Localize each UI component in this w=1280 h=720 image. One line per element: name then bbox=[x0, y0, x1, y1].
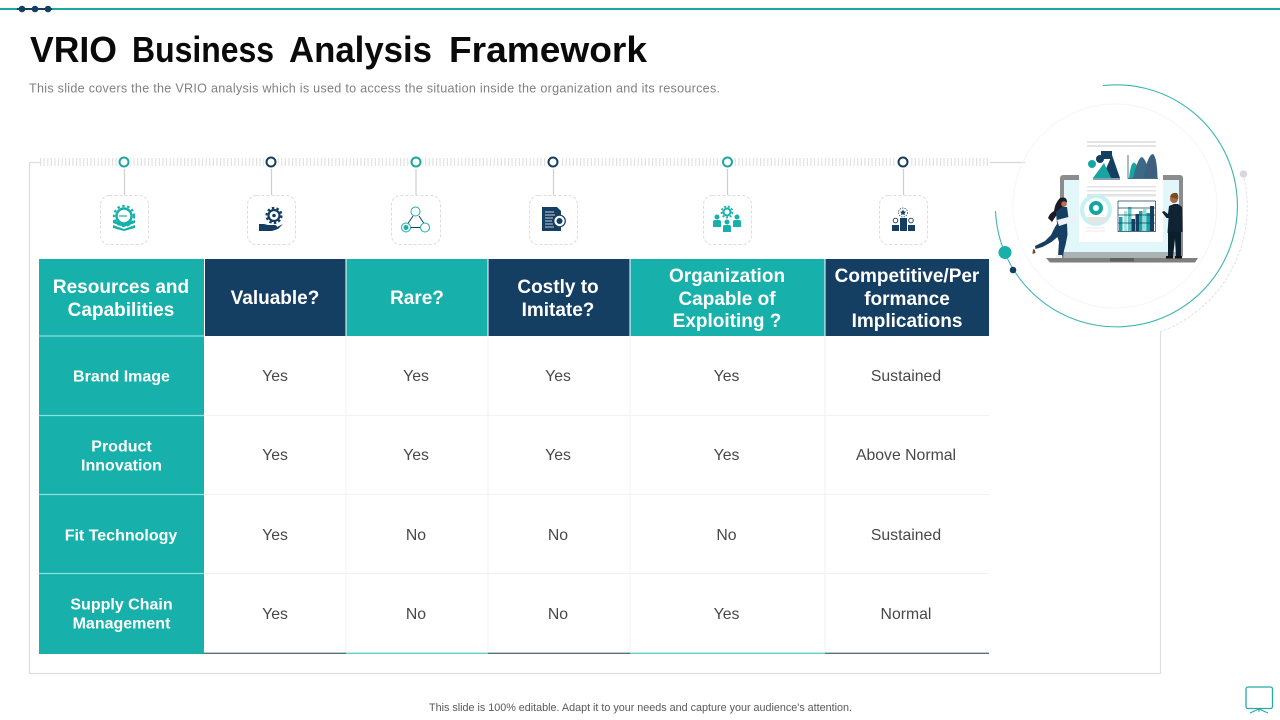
title: VRIO bbox=[30, 29, 117, 70]
row: Brand Image bbox=[262, 368, 941, 385]
header row: Imitate? bbox=[522, 300, 594, 321]
header row: Competitive/Per bbox=[835, 266, 980, 287]
row: Fit Technology: No bbox=[548, 527, 568, 544]
row: Fit Technology bbox=[262, 527, 941, 544]
row: Fit Technology: No bbox=[406, 527, 426, 544]
frame panel outline bbox=[30, 162, 1160, 674]
row: Product Innovation: Above Normal bbox=[856, 447, 956, 464]
row: Supply Chain Management: No bbox=[406, 606, 426, 623]
title: Analysis bbox=[289, 29, 432, 70]
table bbox=[39, 259, 989, 654]
circular illustration frame bbox=[996, 85, 1247, 332]
header row: formance bbox=[864, 289, 950, 310]
title: Business bbox=[132, 29, 274, 70]
icon: team with gear bbox=[704, 196, 752, 244]
subtitle: This slide covers the the VRIO analysis which is used to access the situation inside the organization and its resources. bbox=[29, 82, 720, 96]
laptop bbox=[1046, 175, 1198, 262]
table grid lines bbox=[204, 336, 989, 653]
row: Product Innovation: Yes bbox=[262, 447, 288, 464]
icon: document with dollar seal bbox=[530, 196, 578, 244]
timeline ticks bbox=[40, 158, 1025, 166]
row label column: Supply Chain bbox=[70, 596, 173, 614]
row: Supply Chain Management: Yes bbox=[262, 606, 288, 623]
row: Supply Chain Management: Normal bbox=[881, 606, 931, 623]
row: Product Innovation: Yes bbox=[714, 447, 739, 464]
row label column: Brand Image bbox=[73, 368, 170, 386]
title: Framework bbox=[449, 29, 648, 70]
donut gauge bbox=[1080, 194, 1112, 231]
row: Fit Technology: No bbox=[716, 527, 737, 544]
icon: book with gear and key bbox=[100, 196, 148, 244]
top decorative bar with dots bbox=[0, 6, 1280, 12]
row: Brand Image: Sustained bbox=[871, 368, 941, 385]
row: Product Innovation bbox=[262, 447, 956, 464]
row label column: Innovation bbox=[81, 458, 162, 474]
row: Brand Image: Yes bbox=[262, 368, 288, 385]
bar chart bbox=[1118, 201, 1156, 232]
row: Supply Chain Management: No bbox=[548, 606, 568, 623]
table bottom border bbox=[204, 652, 989, 654]
area chart bbox=[1128, 154, 1158, 178]
row label column: Fit Technology bbox=[65, 528, 177, 544]
header row: Rare? bbox=[390, 288, 444, 309]
icon: presentation screen bbox=[1246, 687, 1272, 713]
row: Supply Chain Management: Yes bbox=[714, 606, 739, 623]
header row: Organization bbox=[669, 266, 785, 287]
timeline markers and connectors bbox=[117, 155, 910, 195]
title bbox=[30, 29, 648, 70]
row label column: Management bbox=[73, 616, 171, 632]
report sheet bbox=[1079, 136, 1163, 242]
row: Product Innovation: Yes bbox=[403, 447, 429, 464]
mountain chart bbox=[1088, 151, 1120, 180]
illustration: laptop with charts and two people bbox=[1032, 136, 1198, 262]
header row: Valuable? bbox=[231, 288, 319, 309]
person: woman running with tablet bbox=[1032, 198, 1078, 258]
icon: connected nodes triangle bbox=[392, 196, 440, 244]
header row: Implications bbox=[852, 311, 962, 332]
header row: Resources and bbox=[53, 277, 189, 298]
header row: Costly to bbox=[517, 277, 599, 298]
row: Brand Image: Yes bbox=[403, 368, 429, 385]
person: man standing bbox=[1162, 193, 1182, 258]
header row bbox=[39, 259, 989, 336]
row label column bbox=[39, 336, 204, 654]
row: Brand Image: Yes bbox=[714, 368, 739, 385]
icon: podium with star bbox=[880, 196, 928, 244]
row: Brand Image: Yes bbox=[545, 368, 571, 385]
row label column: Product bbox=[91, 438, 152, 456]
header row: Capabilities bbox=[68, 300, 174, 321]
header row: Exploiting ? bbox=[673, 311, 781, 332]
row: Fit Technology: Sustained bbox=[871, 527, 941, 544]
header row: Capable of bbox=[678, 289, 776, 310]
icon: hand holding gear with dollar bbox=[248, 196, 296, 244]
row: Product Innovation: Yes bbox=[545, 447, 571, 464]
footer note: This slide is 100% editable. Adapt it to your needs and capture your audience's attention. bbox=[429, 702, 852, 714]
row: Fit Technology: Yes bbox=[262, 527, 288, 544]
row: Supply Chain Management bbox=[262, 606, 931, 623]
